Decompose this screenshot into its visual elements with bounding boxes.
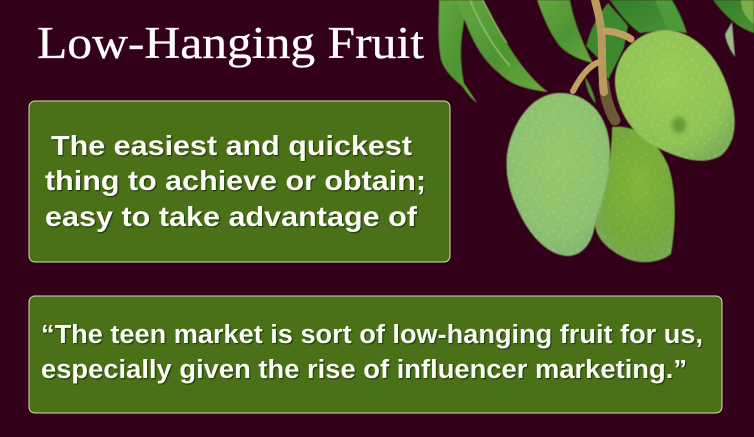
icon: mango branch with leaves and fruit bbox=[438, 0, 754, 262]
quote text: “The teen market is sort of low-hanging fruit for us, bbox=[41, 321, 703, 349]
definition text: thing to achieve or obtain; bbox=[45, 165, 426, 196]
panel: definition bbox=[29, 101, 450, 262]
definition text: easy to take advantage of bbox=[45, 201, 418, 232]
leaves bbox=[438, 0, 754, 104]
stem bbox=[573, 0, 631, 120]
title: Low-Hanging Fruit bbox=[37, 18, 425, 68]
panel: example quote bbox=[29, 296, 722, 413]
quote text bbox=[41, 321, 703, 384]
mango: top right bbox=[615, 30, 735, 161]
definition text bbox=[45, 130, 426, 232]
mango: front left bbox=[507, 93, 610, 256]
quote text: especially given the rise of influencer marketing.” bbox=[41, 356, 687, 384]
mango: back bbox=[595, 127, 675, 262]
definition text: The easiest and quickest bbox=[51, 130, 412, 161]
